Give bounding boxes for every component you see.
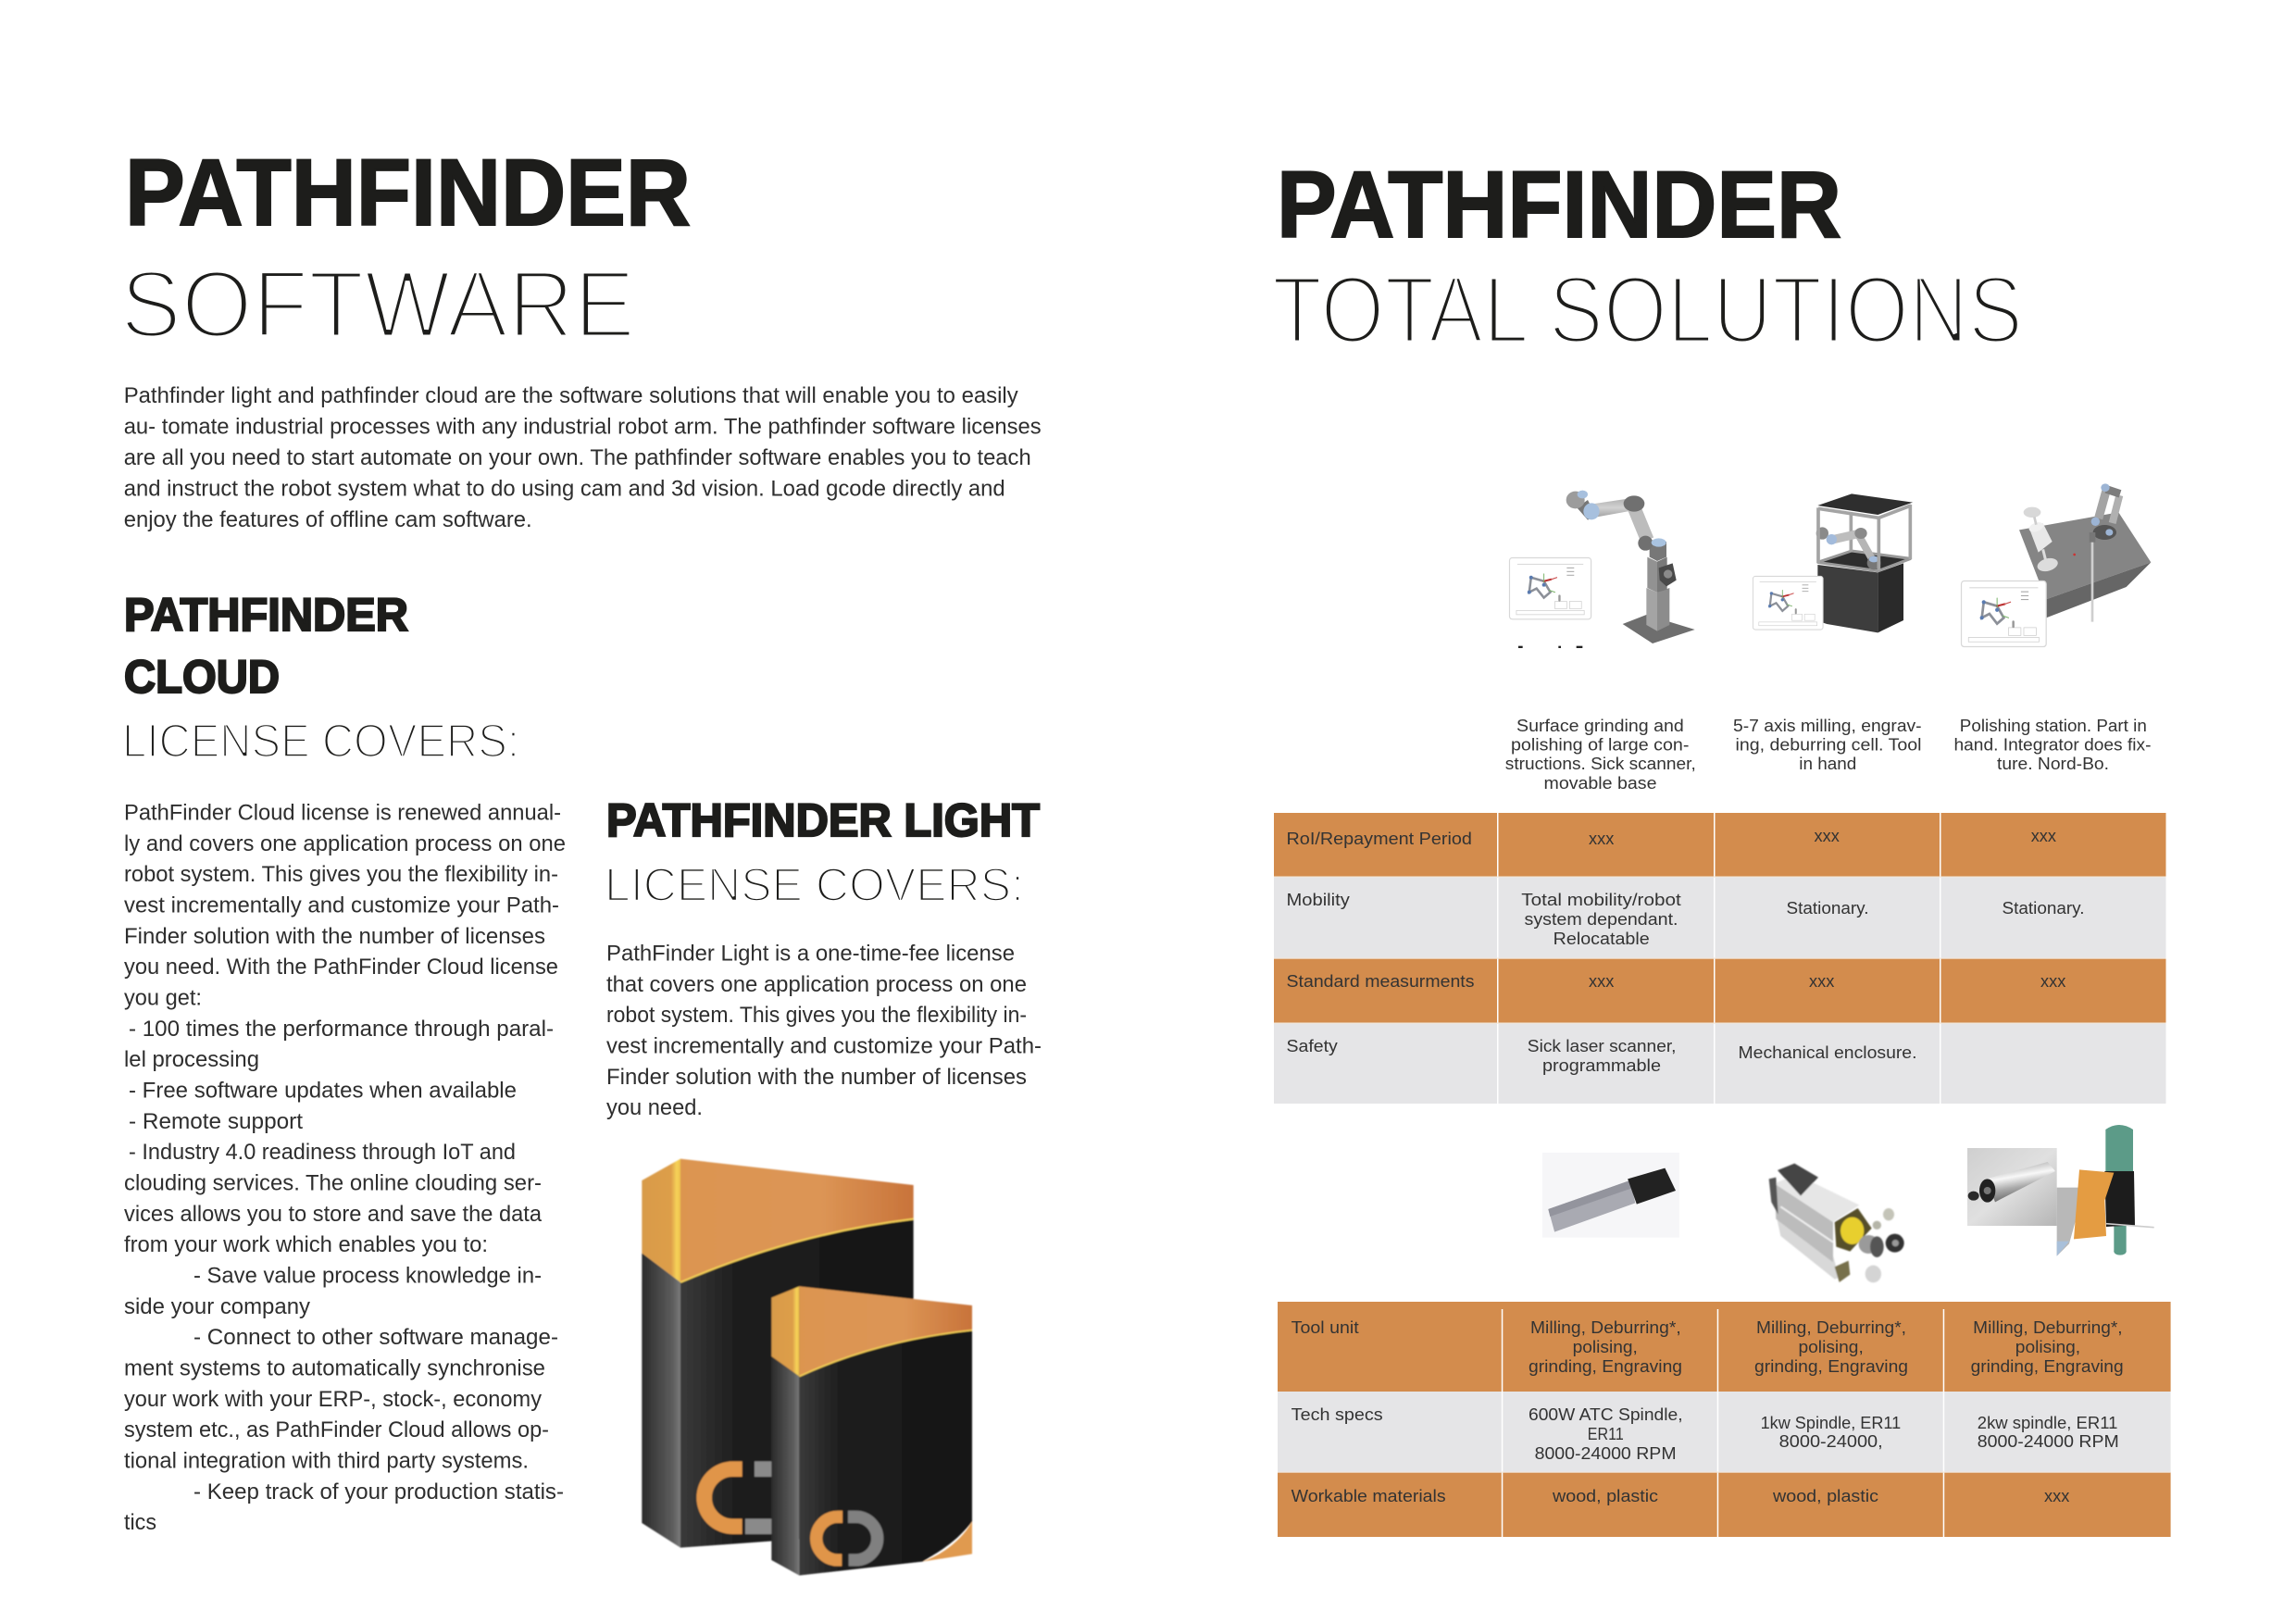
text block: Pathfinder Cloud license: lel processing [124,1047,259,1072]
illustration: polishing station [2019,483,2151,622]
title: Pathfinder Total Solutions [1272,152,2023,363]
row: Tech specs [1292,1405,2119,1463]
captions above table: ture. Nord-Bo. [1997,754,2109,773]
row: Standard measurments: xxx [2040,971,2066,991]
row: Mobility: Total mobility/robot [1521,890,1682,909]
text block: Pathfinder Cloud license: tional integration with third party systems. [124,1448,529,1473]
row: Mobility [1287,890,2085,948]
icon: software boxes [642,1159,972,1576]
row: Mobility: Stationary. [1787,898,1868,918]
intro text block: au- tomate industrial processes with any industrial robot arm. The pathfinder software licenses [124,415,1042,439]
text block: Pathfinder Cloud license: - 100 times the performance through paral- [129,1017,554,1042]
heading: Pathfinder Cloud license covers [122,589,519,767]
row: RoI/Repayment Period [1287,826,2057,848]
row: RoI/Repayment Period: RoI/Repayment Period [1287,829,1472,848]
captions above table: Polishing station. Part in [1960,716,2147,735]
heading: Pathfinder Cloud license covers: CLOUD [124,651,280,703]
illustration: milling cell [1816,493,1913,632]
small box [771,1286,972,1576]
text block: Pathfinder Light license: you need. [606,1095,703,1120]
text block: Pathfinder Cloud license: from your work which enables you to: [124,1232,488,1257]
heading: Pathfinder Light license covers: PATHFINDER LIGHT [606,794,1040,846]
row: Workable materials: wood, plastic [1772,1486,1878,1505]
row: Safety: programmable [1542,1055,1661,1075]
row: Workable materials: Workable materials [1292,1486,1446,1505]
text block: Pathfinder Cloud license: - Remote support [129,1109,303,1134]
captions above table: Surface grinding and [1516,716,1684,735]
captions above table: structions. Sick scanner, [1505,754,1696,773]
text block: Pathfinder Light license: vest incrementally and customize your Path- [606,1033,1042,1059]
captions above table: movable base [1544,773,1657,793]
row: Standard measurments: xxx [1809,971,1835,991]
text block: Pathfinder Light license [606,941,1042,1120]
text block: Pathfinder Cloud license: your work with your ERP-, stock-, economy [124,1387,543,1412]
text block: Pathfinder Cloud license: you get: [124,985,202,1011]
row: Standard measurments: xxx [1589,971,1615,991]
icon: tablet 2 [1753,576,1823,630]
icon: spindle tool 3 [1967,1125,2154,1256]
row: Standard measurments: Standard measurments [1287,971,1474,991]
row: Mobility: Relocatable [1554,929,1650,948]
text block: Pathfinder Cloud license: - Industry 4.0 readiness through IoT and [129,1140,516,1165]
text block: Pathfinder Cloud license: - Keep track of your production statis- [193,1479,564,1504]
text block: Pathfinder Cloud license: Finder solution with the number of licenses [124,924,545,949]
icon: spindle tool 1 [1542,1153,1679,1238]
captions above table: ing, deburring cell. Tool [1735,735,1922,754]
icon: spindle tool 2 [1769,1164,1904,1282]
icon: tablet 3 [1962,581,2046,647]
title: Pathfinder Software: SOFTWARE [120,251,635,357]
intro text block: are all you need to start automate on your own. The pathfinder software enables you to teach [124,445,1031,470]
text block: Pathfinder Cloud license: side your company [124,1294,311,1319]
table: tool comparison [1278,1302,2171,1537]
row: Tool unit: polising, [1798,1337,1864,1356]
intro text block: enjoy the features of offline cam software. [124,507,532,532]
text block: Pathfinder Cloud license: system etc., as PathFinder Cloud allows op- [124,1417,549,1442]
row: Tech specs: 8000-24000 RPM [1535,1443,1677,1463]
row: Tool unit: grinding, Engraving [1529,1356,1682,1376]
intro text block: Pathfinder light and pathfinder cloud are the software solutions that will enable you to easily [124,383,1018,408]
row: Mobility: system dependant. [1524,909,1678,929]
row: Mobility: Mobility [1287,890,1351,909]
row: Tech specs: ER11 [1588,1424,1624,1443]
text block: Pathfinder Cloud license: ly and covers one application process on one [124,831,566,856]
row: Safety [1287,1036,1916,1075]
text block: Pathfinder Cloud license [124,800,566,1535]
row: Tech specs: 600W ATC Spindle, [1529,1405,1683,1424]
text block: Pathfinder Cloud license: - Free software updates when available [129,1078,517,1104]
row: Tool unit: Tool unit [1292,1317,1360,1337]
text block: Pathfinder Cloud license: clouding services. The online clouding ser- [124,1170,542,1196]
row: Tech specs: 2kw spindle, ER11 [1978,1413,2117,1432]
row: Workable materials [1292,1486,2070,1505]
row: Standard measurments [1287,971,2066,991]
row: Tool unit: polising, [1573,1337,1638,1356]
row: Tool unit: grinding, Engraving [1754,1356,1908,1376]
icon: tablet 1 [1509,557,1591,619]
row: Safety: Mechanical enclosure. [1739,1042,1916,1062]
captions above table: hand. Integrator does fix- [1953,735,2152,754]
table: systems comparison [1274,813,2166,1104]
text block: Pathfinder Cloud license: vest incrementally and customize your Path- [124,893,559,918]
text block: Pathfinder Cloud license: robot system. This gives you the flexibility in- [124,862,558,887]
heading: Pathfinder Cloud license covers: PATHFINDER [124,589,408,641]
text block: Pathfinder Cloud license: - Connect to other software manage- [193,1325,558,1350]
row: Mobility: Stationary. [2002,898,2085,918]
title: Pathfinder Total Solutions: TOTAL SOLUTIONS [1272,256,2023,363]
row: Tool unit [1292,1317,2124,1376]
row: RoI/Repayment Period: xxx [1815,826,1840,845]
row: Workable materials: wood, plastic [1552,1486,1658,1505]
row: Tech specs: 8000-24000 RPM [1978,1431,2119,1451]
text block: Pathfinder Cloud license: you need. With the PathFinder Cloud license [124,955,558,980]
row: Tech specs: 1kw Spindle, ER11 [1761,1413,1901,1432]
captions above table: in hand [1799,754,1856,773]
illustration: robot on movable pedestal [1518,491,1695,648]
row: RoI/Repayment Period: xxx [2031,826,2057,845]
row: Tech specs: 8000-24000, [1779,1431,1883,1451]
title: Pathfinder Software: PATHFINDER [125,140,691,245]
intro text block: and instruct the robot system what to do using cam and 3d vision. Load gcode directly and [124,476,1005,502]
text block: Pathfinder Light license: Finder solution with the number of licenses [606,1065,1027,1090]
captions above table: polishing of large con- [1511,735,1689,754]
row: Tool unit: Milling, Deburring*, [1973,1317,2123,1337]
text block: Pathfinder Light license: that covers one application process on one [606,972,1027,997]
text block: Pathfinder Cloud license: ment systems to automatically synchronise [124,1355,545,1380]
text block: Pathfinder Cloud license: PathFinder Cloud license is renewed annual- [124,800,561,826]
captions above table [1505,716,2152,793]
text block: Pathfinder Cloud license: - Save value process knowledge in- [193,1263,542,1289]
row: Tool unit: grinding, Engraving [1971,1356,2124,1376]
text block: Pathfinder Cloud license: vices allows you to store and save the data [124,1202,542,1227]
heading: Pathfinder Light license covers: LICENSE COVERS: [605,858,1024,911]
title: Pathfinder Software [120,140,691,357]
heading: Pathfinder Cloud license covers: LICENSE COVERS: [122,715,519,767]
row: Tool unit: Milling, Deburring*, [1530,1317,1681,1337]
title: Pathfinder Total Solutions: PATHFINDER [1277,152,1841,257]
row: Tech specs: Tech specs [1292,1405,1383,1424]
heading: Pathfinder Light license covers [605,794,1040,911]
text block: Pathfinder Light license: PathFinder Light is a one-time-fee license [606,941,1015,967]
row: Workable materials: xxx [2044,1486,2070,1505]
row: Safety: Safety [1287,1036,1339,1055]
text block: Pathfinder Light license: robot system. This gives you the flexibility in- [606,1003,1027,1028]
text block: Pathfinder Cloud license: tics [124,1510,156,1535]
row: RoI/Repayment Period: xxx [1589,829,1615,848]
intro text block [124,383,1042,532]
large box [642,1159,914,1548]
row: Tool unit: polising, [2015,1337,2080,1356]
row: Safety: Sick laser scanner, [1528,1036,1676,1055]
row: Tool unit: Milling, Deburring*, [1756,1317,1906,1337]
captions above table: 5-7 axis milling, engrav- [1733,716,1922,735]
